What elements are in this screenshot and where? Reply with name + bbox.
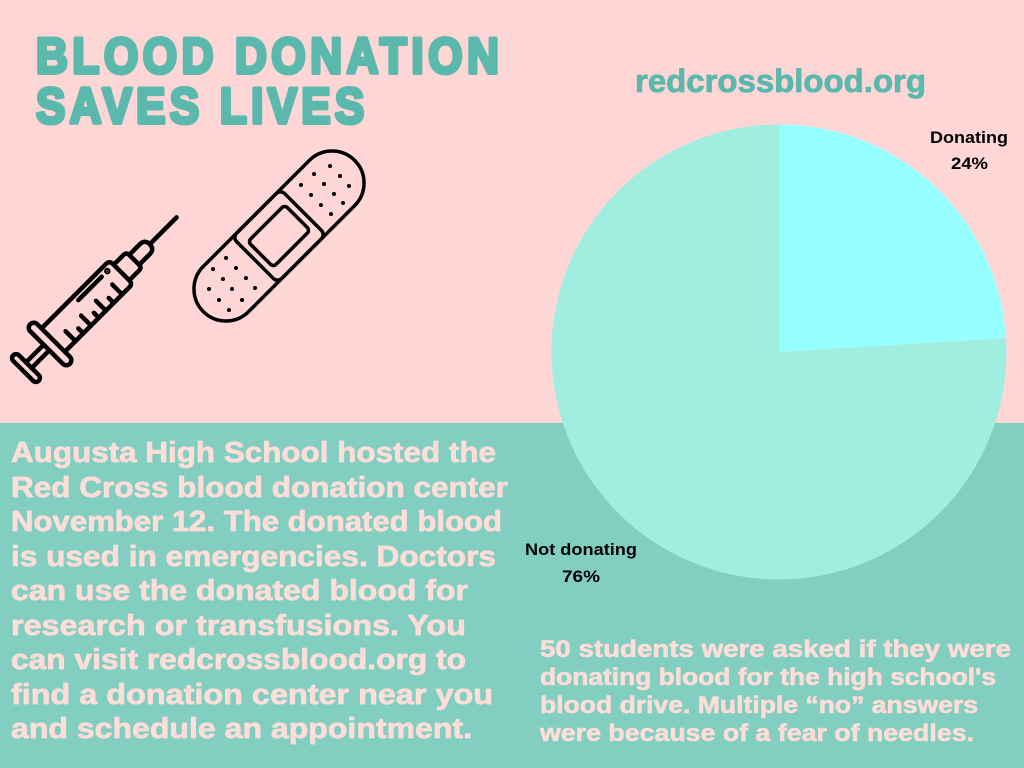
- panel: teal bottom background: [0, 423, 1024, 768]
- text block: blood drive description: Augusta High School hosted the: [11, 437, 496, 469]
- pie label: not donating: [525, 540, 637, 586]
- text block: blood drive description: can use the donated blood for: [11, 575, 468, 607]
- icon: bandage: [181, 138, 377, 334]
- pie label: donating: 24%: [951, 154, 988, 173]
- text block: blood drive description: [11, 437, 508, 745]
- pie label: donating: [930, 128, 1008, 173]
- pie label: donating: Donating: [930, 128, 1008, 147]
- pie slice: not donating 76%: [551, 124, 1006, 579]
- text block: blood drive description: Red Cross blood donation center: [11, 472, 508, 504]
- text block: blood drive description: can visit redcrossblood.org to: [11, 644, 466, 676]
- source url heading: redcrossblood.org: [635, 63, 926, 99]
- icon: syringe: [3, 198, 196, 391]
- pie slice: donating 24%: [780, 124, 1006, 352]
- title: [36, 27, 499, 134]
- pie chart: [551, 124, 1006, 579]
- pie label: not donating: Not donating: [525, 540, 637, 559]
- text block: blood drive description: and schedule an appointment.: [11, 713, 472, 745]
- text block: survey note: donating blood for the high school's: [540, 664, 996, 691]
- panel: pink top background: [0, 0, 1024, 423]
- title: BLOOD DONATION: [36, 27, 499, 84]
- text block: blood drive description: November 12. The donated blood: [11, 506, 502, 538]
- text block: blood drive description: research or transfusions. You: [11, 610, 466, 642]
- text block: blood drive description: find a donation center near you: [11, 679, 493, 711]
- text block: blood drive description: is used in emergencies. Doctors: [11, 541, 496, 573]
- text block: survey note: were because of a fear of needles.: [539, 720, 974, 747]
- title: SAVES LIVES: [36, 77, 364, 134]
- text block: survey note: [539, 636, 1011, 747]
- text block: survey note: blood drive. Multiple “no” answers: [540, 692, 978, 719]
- text block: survey note: 50 students were asked if they were: [540, 636, 1011, 663]
- pie label: not donating: 76%: [562, 567, 600, 586]
